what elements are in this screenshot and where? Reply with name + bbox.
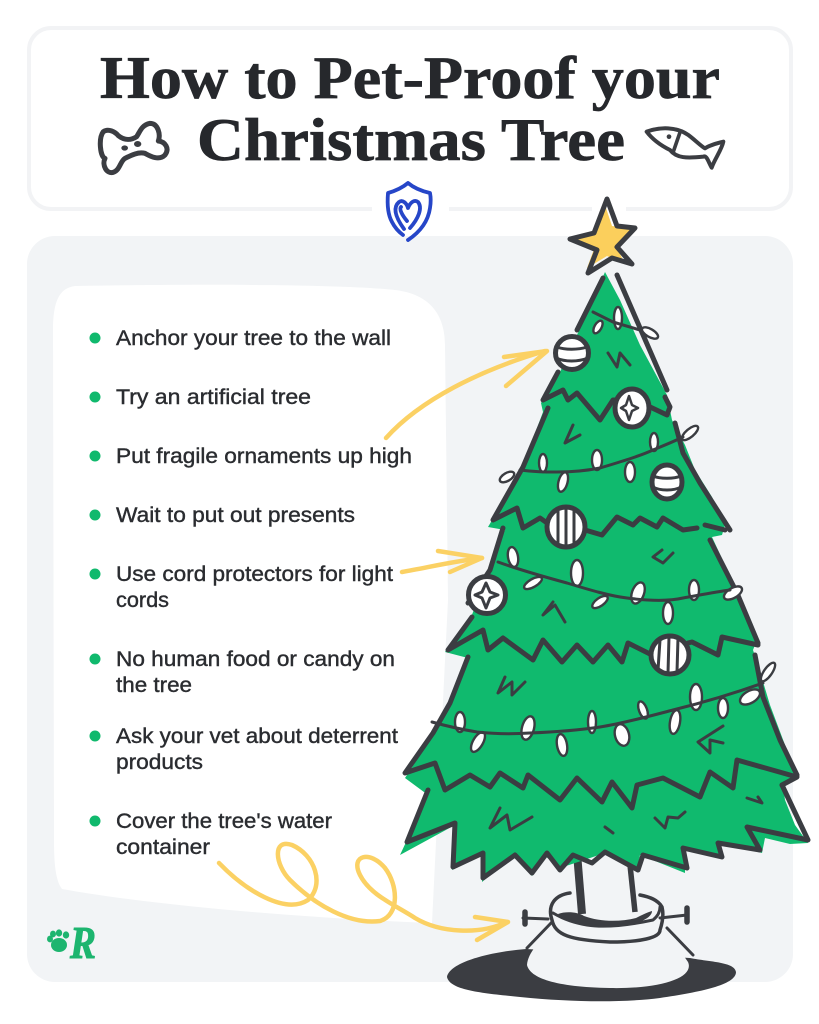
tip: deterrent products [90, 725, 398, 774]
title: Christmas Tree [197, 107, 625, 173]
title: How to Pet-Proof your [100, 45, 720, 111]
tip: deterrent products: Ask your vet about deterrent [116, 725, 398, 748]
icon: fish [647, 128, 723, 168]
tree stand and shadow [447, 893, 736, 1001]
ornament: striped top [556, 336, 588, 370]
tips list [90, 327, 412, 859]
ornament: striped right [652, 465, 682, 499]
tip: artificial tree: Try an artificial tree [116, 386, 311, 409]
ornament: star upper [615, 389, 649, 427]
tip: water container: container [116, 836, 210, 859]
tree outlines [405, 275, 808, 878]
christmas tree [400, 199, 808, 1001]
logo: paw and R [47, 917, 96, 968]
star topper [570, 199, 635, 273]
tree foliage [400, 272, 808, 882]
panel: main background [27, 236, 793, 982]
string lights: third [498, 546, 744, 624]
panel: tips list background [53, 285, 448, 923]
ornament: star left [468, 576, 506, 614]
logo: paw and R: R [69, 917, 96, 968]
tip: no human food: No human food or candy on [116, 648, 395, 671]
arrow: to light cords [402, 551, 482, 572]
icon: shield with heart [388, 183, 431, 240]
tip: deterrent products: products [116, 751, 203, 774]
tip: cord protectors [90, 563, 393, 612]
header card [29, 28, 791, 214]
tip: anchor: Anchor your tree to the wall [116, 327, 391, 350]
string lights: second [498, 424, 700, 493]
tip: fragile ornaments: Put fragile ornaments up high [116, 445, 412, 468]
tree trunk [577, 853, 636, 921]
arrow: to high ornament [386, 351, 547, 438]
title [100, 45, 720, 173]
tip: cord protectors: cords [116, 589, 169, 612]
ornament: vertical stripes centre [547, 507, 585, 547]
icon: bone [100, 123, 167, 173]
tree texture marks [490, 353, 762, 833]
tip: presents: Wait to put out presents [116, 504, 355, 527]
tip: cord protectors: Use cord protectors for light [116, 563, 393, 586]
string lights: top [591, 307, 660, 341]
ornament: vertical stripes lower [651, 636, 689, 674]
string lights: fourth [432, 661, 778, 757]
tip: water container: Cover the tree's water [116, 810, 332, 833]
tip: no human food [90, 648, 395, 697]
tip: no human food: the tree [116, 674, 192, 697]
tip: water container [90, 810, 332, 859]
arrow: loopy to water container [219, 844, 508, 940]
